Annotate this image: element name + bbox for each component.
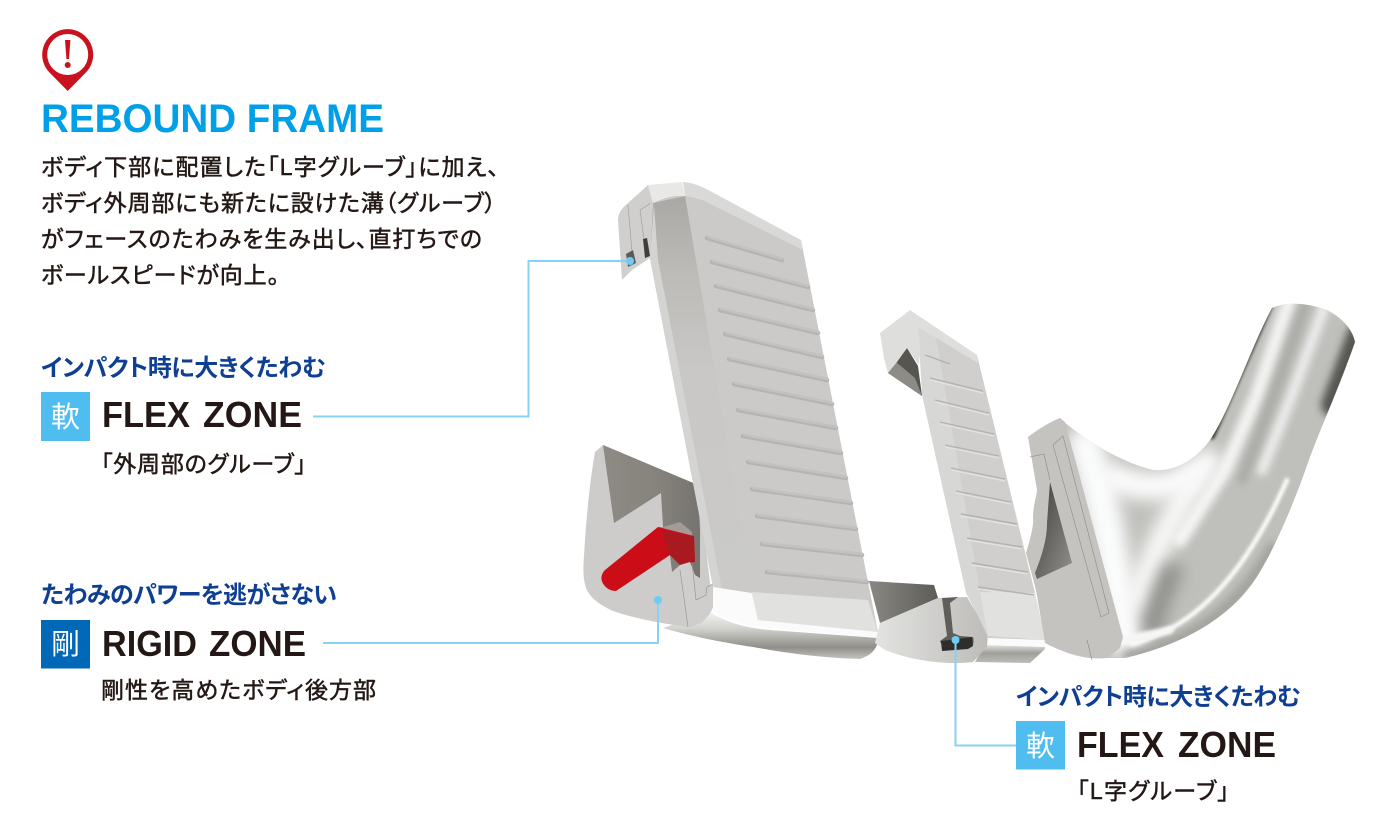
leader line: rigid zone [323, 596, 662, 643]
callout: rigid zone: 剛 [51, 629, 80, 661]
text block: description: ボールスピードが向上。 [41, 262, 279, 288]
face plate [618, 182, 878, 638]
callout: upper flex zone: 「外周部のグルーブ」 [101, 451, 306, 477]
text block: description: ボディ下部に配置した「L字グルーブ」に加え、 [41, 154, 499, 180]
leader line: lower flex zone [952, 636, 1016, 746]
callout: upper flex zone: FLEX [102, 394, 190, 435]
middle piece: cross-section [869, 581, 1045, 663]
diagram: exploded iron head [583, 182, 1358, 663]
text block: description [41, 154, 499, 288]
icon: red rigid zone insert [601, 527, 695, 591]
callout: lower flex zone [1016, 684, 1301, 804]
callout: rigid zone: RIGID [102, 623, 197, 664]
callout: rigid zone: 剛性を高めたボディ後方部 [101, 677, 376, 703]
callout: upper flex zone: 軟 [51, 401, 80, 434]
callout: lower flex zone: 「L字グルーブ」 [1077, 778, 1229, 804]
callout: upper flex zone [41, 355, 326, 477]
sole: silver lower edge of face plate [663, 612, 878, 659]
callout: rigid zone [41, 581, 376, 703]
leader line: upper flex zone [313, 257, 634, 416]
callout: upper flex zone: ZONE [203, 394, 302, 435]
callout: rigid zone: ZONE [209, 623, 306, 664]
callout: lower flex zone: 軟 [1026, 730, 1055, 763]
section: rear body with cavity [583, 445, 713, 627]
title: REBOUND FRAME [41, 97, 384, 141]
callout: upper flex zone: インパクト時に大きくたわむ [41, 355, 326, 382]
face grooves [707, 237, 867, 582]
text block: description: がフェースのたわみを生み出し、直打ちでの [41, 226, 482, 252]
callout: rigid zone: たわみのパワーを逃がさない [41, 581, 337, 609]
callout: lower flex zone: ZONE [1178, 724, 1276, 765]
heel cross-section [1026, 418, 1123, 660]
icon: red alert pin [42, 29, 93, 91]
callout: lower flex zone: インパクト時に大きくたわむ [1016, 684, 1301, 711]
callout: lower flex zone: FLEX [1077, 724, 1164, 765]
text block: description: ボディ外周部にも新たに設けた溝（グルーブ） [41, 190, 496, 216]
middle piece: plate [880, 310, 1045, 640]
hosel: chrome body and neck [1026, 298, 1358, 660]
